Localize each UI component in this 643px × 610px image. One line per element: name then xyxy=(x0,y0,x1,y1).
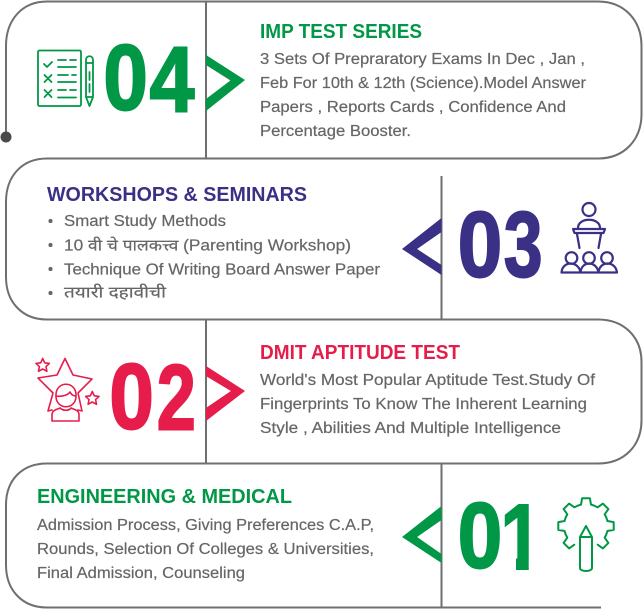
number 01: 1 xyxy=(500,486,543,590)
number 01 xyxy=(460,502,529,570)
text block: Papers , Reports Cards , Confidence And xyxy=(260,99,566,116)
arrow: left chevron xyxy=(402,218,442,275)
bullet list: तयारी दहावीची xyxy=(64,284,167,302)
panel: step 01 engineering and medical xyxy=(37,489,615,582)
number 03: 3 xyxy=(504,194,542,297)
number 02 xyxy=(109,345,196,450)
heading: DMIT APTITUDE TEST xyxy=(260,342,460,364)
text block: Fingerprints To Know The Inherent Learning xyxy=(260,396,587,413)
bullet list: Smart Study Methods xyxy=(64,213,226,230)
start dot xyxy=(0,132,12,142)
text block: Percentage Booster. xyxy=(260,123,411,140)
panel: step 04 test series xyxy=(38,21,586,140)
text block xyxy=(37,517,374,582)
text block: 3 Sets Of Prepraratory Exams In Dec , Jan , xyxy=(260,51,585,68)
heading: IMP TEST SERIES xyxy=(260,21,422,43)
icon: gear and pencil xyxy=(558,498,614,571)
number 03 xyxy=(458,193,542,297)
icon: star with person xyxy=(36,358,99,421)
bullet list: 10 वी चे पालकत्त्व (Parenting Workshop) xyxy=(64,236,351,254)
number 04: 0 xyxy=(103,26,148,130)
panel: step 02 DMIT xyxy=(36,342,596,450)
bullet list: Technique Of Writing Board Answer Paper xyxy=(64,262,380,278)
text block: Style , Abilities And Multiple Intelligence xyxy=(260,420,561,437)
icon: speaker at podium with audience xyxy=(562,203,617,272)
arrow: left chevron xyxy=(402,506,442,563)
arrow: right chevron xyxy=(206,366,245,421)
arrow: right chevron xyxy=(206,55,245,111)
heading: ENGINEERING & MEDICAL xyxy=(37,486,292,508)
number 04: 4 xyxy=(150,28,195,132)
heading: WORKSHOPS & SEMINARS xyxy=(47,184,307,206)
text block: Rounds, Selection Of Colleges & Universities, xyxy=(37,541,374,558)
number 01: 0 xyxy=(458,484,502,588)
panel: step 03 workshops xyxy=(47,184,617,302)
icon: checklist and pencil xyxy=(38,50,93,106)
text block: Admission Process, Giving Preferences C.A.P, xyxy=(37,517,374,534)
number 02: 0 xyxy=(109,345,154,449)
bullet list xyxy=(48,213,380,302)
number 04 xyxy=(103,26,195,132)
text block: Final Admission, Counseling xyxy=(37,565,245,582)
number 02: 2 xyxy=(157,346,196,450)
number 03: 0 xyxy=(458,193,502,297)
text block xyxy=(260,51,586,140)
text block: Feb For 10th & 12th (Science).Model Answer xyxy=(260,75,586,92)
text block: World's Most Popular Aptitude Test.Study Of xyxy=(260,372,596,389)
text block xyxy=(260,372,596,437)
